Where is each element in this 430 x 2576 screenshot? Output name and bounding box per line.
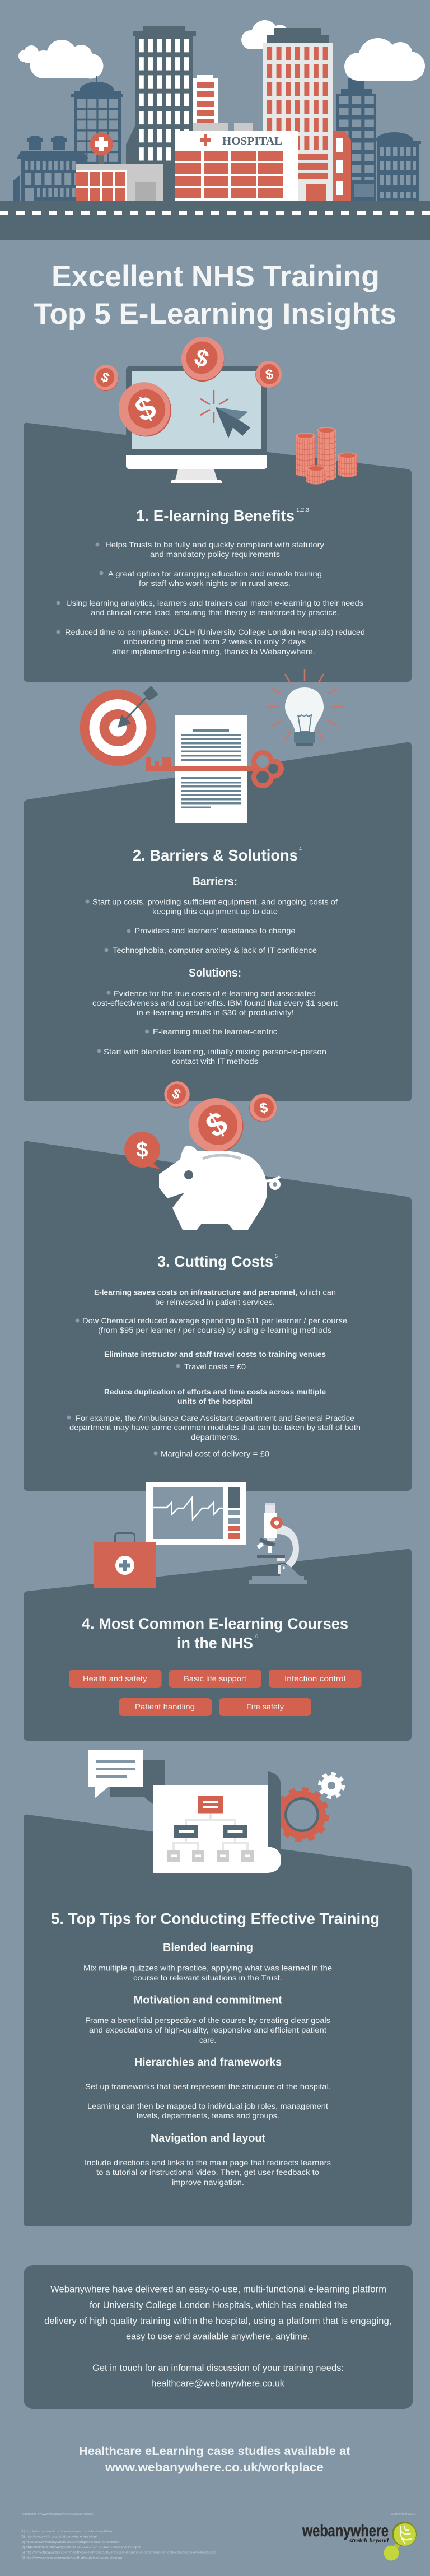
- speech bubble with dollar: [124, 1132, 160, 1169]
- text block: travel costs: [104, 1350, 326, 1371]
- date: September 2015: [391, 2513, 415, 2516]
- panel: e-learning benefits: [24, 423, 412, 682]
- tip: navigation and layout: to a tutorial or instructional video. Then, get user feedback to: [96, 2168, 319, 2177]
- tip: blended learning: Mix multiple quizzes with practice, applying what was learned in the: [83, 1964, 332, 1973]
- tag: patient handling: [119, 1698, 212, 1716]
- text block: benefits list: A great option for arranging education and remote training: [108, 569, 322, 578]
- light bulb: [267, 669, 343, 746]
- tag: fire safety: Fire safety: [246, 1702, 284, 1711]
- target with arrow: [80, 686, 158, 766]
- tag: fire safety: [219, 1698, 311, 1716]
- text block: infrastructure saving: [75, 1287, 347, 1335]
- heading: most common courses: in the NHS: [177, 1634, 253, 1652]
- tip: hierarchies and frameworks: [85, 2057, 331, 2120]
- heading: e-learning benefits: 1,2,3: [296, 507, 309, 513]
- call to action: case studies link: [79, 2445, 350, 2474]
- icon: computer with coins: [89, 331, 357, 484]
- key: [146, 750, 284, 788]
- text block: travel costs: Travel costs = £0: [184, 1362, 246, 1371]
- panel: Webanywhere call to action: [24, 2265, 413, 2409]
- references: [4] http://onlinelibrary.wiley.com/doi/10.1111/j.1470-3327.2005.00614.x/pdf: [21, 2546, 141, 2549]
- ECG monitor: [146, 1482, 246, 1545]
- title: Top 5 E-Learning Insights: [34, 297, 396, 331]
- speech bubble white: [88, 1750, 143, 1798]
- text block: case description: Webanywhere have delivered an easy-to-use, multi-functional e-learning platform: [50, 2285, 386, 2295]
- tip: motivation and commitment: [85, 1994, 330, 2044]
- gear white: [320, 1774, 343, 1797]
- text block: benefits list: and clinical case-load, ensuring that theory is reinforced by practice.: [91, 608, 339, 617]
- text block: barriers list: Start up costs, providing sufficient equipment, and ongoing costs of: [92, 898, 338, 906]
- logo tagline: stretch beyond: [349, 2536, 389, 2544]
- tip: navigation and layout: Navigation and layout: [151, 2132, 265, 2145]
- text block: solutions list: E-learning must be learner-centric: [153, 1027, 277, 1036]
- coin stacks: [296, 427, 357, 484]
- text block: solutions list: contact with IT methods: [172, 1057, 258, 1066]
- tag: basic life support: [169, 1670, 261, 1688]
- text block: contact: healthcare@webanywhere.co.uk: [151, 2379, 285, 2389]
- coin right: $: [259, 1100, 269, 1117]
- dark tower: [126, 26, 196, 201]
- heading: barriers and solutions: 2. Barriers & Solutions: [133, 847, 298, 864]
- text block: reduce duplication: For example, the Ambulance Care Assistant department and General Practice: [76, 1413, 354, 1422]
- cloud left: [18, 40, 103, 78]
- text block: infrastructure saving: which can: [299, 1287, 336, 1296]
- call to action: case studies link: www.webanywhere.co.uk/workplace: [105, 2461, 324, 2474]
- org chart connectors: [172, 1813, 249, 1850]
- blue domed building left: [71, 76, 123, 165]
- text block: case description: for University College London Hospitals, which has enabled the: [90, 2300, 347, 2310]
- text block: benefits list: Helps Trusts to be fully and quickly compliant with statutory: [105, 540, 324, 549]
- icon group: speech bubbles, org chart, gears: [88, 1750, 343, 1873]
- text block: solutions list: cost-effectiveness and cost benefits. IBM found that every $1 spent: [92, 999, 338, 1007]
- hospital cross: [200, 134, 211, 146]
- coin left: $: [170, 1086, 183, 1103]
- references: [21, 2530, 216, 2560]
- small coin left: $: [99, 369, 112, 386]
- panel: cutting costs: [24, 1141, 412, 1491]
- blue building right: [336, 78, 376, 201]
- tip: hierarchies and frameworks: levels, departments, teams and groups.: [137, 2111, 279, 2120]
- medical kit: [94, 1533, 156, 1588]
- subheading: solutions: Solutions:: [189, 967, 241, 979]
- tall red-windowed tower: [263, 28, 333, 201]
- gear red: [277, 1789, 327, 1840]
- heading: cutting costs: 5: [275, 1253, 278, 1259]
- tip: hierarchies and frameworks: Set up frameworks that best represent the structure of the hospital.: [85, 2082, 331, 2091]
- references: [1] http://nhs.premierit.com/news-events...articles/view?id=4: [21, 2530, 112, 2533]
- heading: e-learning benefits: 1. E-learning Benefits: [136, 507, 295, 524]
- cursor with click rays: [200, 390, 250, 438]
- text block: barriers list: Providers and learners’ resistance to change: [134, 927, 296, 935]
- icon: piggy bank with coins: [124, 1077, 281, 1230]
- speech bubble with dollar: $: [136, 1138, 148, 1162]
- document: [175, 715, 247, 823]
- text block: travel costs: Eliminate instructor and staff travel costs to training venues: [104, 1350, 326, 1359]
- text block: benefits list: Reduced time-to-compliance: UCLH (University College London Hospitals) reduced: [65, 627, 365, 636]
- icon group: target, document, key, light bulb: [80, 669, 343, 823]
- small coin left: [89, 361, 123, 395]
- scroll with org chart: [153, 1771, 281, 1873]
- text block: reduce duplication: Reduce duplication of efforts and time costs across multiple: [104, 1387, 326, 1396]
- hospital windows: [175, 151, 283, 198]
- text block: barriers list: keeping this equipment up to date: [152, 908, 278, 915]
- course tags: [69, 1670, 362, 1716]
- pig body: [159, 1146, 281, 1230]
- main hospital building: [175, 123, 298, 201]
- hospital sign: HOSPITAL: [222, 135, 282, 147]
- blue low building left: [13, 136, 88, 201]
- panel: top tips: [24, 1815, 412, 2226]
- tip: hierarchies and frameworks: Hierarchies and frameworks: [134, 2057, 282, 2069]
- org chart boxes: [167, 1796, 254, 1862]
- tip: motivation and commitment: Frame a beneficial perspective of the course by creating clear goals: [85, 2016, 330, 2025]
- cloud right: [344, 38, 425, 81]
- panel: most common courses: [24, 1549, 412, 1741]
- small coin right: [254, 359, 283, 390]
- text block: contact: Get in touch for an informal discussion of your training needs:: [92, 2363, 344, 2373]
- text block: benefits list: Using learning analytics, learners and trainers can match e-learning to their needs: [66, 598, 363, 607]
- credit line: Infographic by www.webanywhere.co.uk/workplace: [21, 2513, 93, 2516]
- hero illustration: hospital city skyline: [0, 20, 430, 240]
- references: [6] http://www.shropscommunityhealth.nhs.uk/mandatory-training: [21, 2556, 122, 2560]
- tip: navigation and layout: Include directions and links to the main page that redirects learners: [85, 2158, 331, 2167]
- tip: blended learning: Blended learning: [163, 1942, 253, 1954]
- text block: benefits list: onboarding time cost from 2 weeks to only 2 days: [124, 637, 306, 646]
- tip: motivation and commitment: and expectations of high-quality, responsive and efficient patient: [89, 2025, 326, 2034]
- heading: most common courses: 6: [255, 1634, 258, 1639]
- text block: barriers list: Technophobia, computer anxiety & lack of IT confidence: [113, 946, 317, 955]
- tag: basic life support: Basic life support: [184, 1674, 246, 1683]
- text block: benefits list: and mandatory policy requirements: [150, 550, 280, 559]
- text block: case description: delivery of high quality training within the hospital, using a platform that is engaging,: [44, 2316, 392, 2326]
- text block: infrastructure saving: (from $95 per learner / per course) by using e-learning methods: [98, 1326, 331, 1335]
- text block: barriers list: [85, 898, 338, 955]
- text block: solutions list: [92, 989, 338, 1066]
- text block: reduce duplication: units of the hospital: [177, 1397, 253, 1406]
- text block: case description: [44, 2285, 392, 2342]
- text block: solutions list: Start with blended learning, initially mixing person-to-person: [104, 1048, 326, 1056]
- tip: navigation and layout: [85, 2132, 331, 2187]
- title: Excellent NHS Training: [52, 260, 380, 293]
- tip: motivation and commitment: care.: [199, 2035, 216, 2044]
- big coin: $: [130, 388, 161, 429]
- icon group: medical kit, ECG monitor, microscope: [94, 1482, 307, 1588]
- tag: infection control: [269, 1670, 362, 1688]
- monitor: [126, 366, 267, 483]
- references: [3] https://www.webanywhere.co.uk/workplace/case-studies/uclh: [21, 2541, 120, 2544]
- text block: infrastructure saving: E-learning saves costs on infrastructure and personnel,: [94, 1287, 297, 1296]
- text block: benefits list: for staff who work nights or in rural areas.: [139, 579, 291, 588]
- text block: case description: easy to use and available anywhere, anytime.: [126, 2332, 310, 2342]
- heading: barriers and solutions: 4: [299, 846, 302, 852]
- top coin: $: [191, 343, 212, 373]
- references: [2] http://www.e-lfh.org.uk/about/why-e-learning/: [21, 2536, 97, 2539]
- heading: most common courses: [82, 1615, 348, 1652]
- small clinic with sign: [76, 132, 163, 201]
- text block: reduce duplication: [67, 1387, 361, 1458]
- top coin: [175, 331, 231, 388]
- coin big: $: [200, 1104, 233, 1145]
- blue domed building far right: [376, 132, 421, 201]
- heading: top tips: 5. Top Tips for Conducting Effective Training: [51, 1910, 380, 1927]
- text block: benefits list: after implementing e-learning, thanks to Webanywhere.: [112, 647, 315, 656]
- text block: benefits list: [56, 540, 365, 656]
- coin big: [183, 1092, 249, 1159]
- microscope: [249, 1503, 307, 1584]
- subheading: barriers: Barriers:: [193, 876, 237, 888]
- logo: webanywhere: [302, 2522, 417, 2560]
- text block: reduce duplication: departments.: [191, 1433, 240, 1442]
- small striped tower: [193, 75, 218, 125]
- tag: health and safety: [69, 1670, 161, 1688]
- tag: health and safety: Health and safety: [83, 1674, 147, 1683]
- cloud middle: [241, 20, 288, 49]
- road: [0, 201, 430, 240]
- tag: patient handling: Patient handling: [135, 1702, 195, 1711]
- title: [34, 260, 396, 331]
- coin left: [160, 1077, 194, 1112]
- tag: infection control: Infection control: [284, 1674, 345, 1683]
- logo wordmark: webanywhere: [302, 2522, 389, 2540]
- heading: most common courses: 4. Most Common E-learning Courses: [82, 1615, 348, 1633]
- references: [5] http://www.theguardian.com/healthcare-network/2015/may/11/e-learning-in-healthcare-benefits-challenges-and-limitations: [21, 2551, 216, 2555]
- tip: navigation and layout: improve navigation.: [172, 2178, 244, 2187]
- logo mark: [384, 2522, 417, 2560]
- tip: hierarchies and frameworks: Learning can then be mapped to individual job roles, management: [87, 2101, 328, 2110]
- coin right: [247, 1092, 278, 1124]
- speech bubble dark: [110, 1760, 165, 1808]
- panel: barriers and solutions: [24, 742, 412, 1101]
- text block: infrastructure saving: be reinvested in patient services.: [155, 1298, 275, 1306]
- text block: contact: [92, 2363, 344, 2389]
- big coin: [113, 376, 177, 443]
- text block: infrastructure saving: Dow Chemical reduced average spending to $11 per learner / per course: [82, 1316, 347, 1325]
- text block: solutions list: Evidence for the true costs of e-learning and associated: [114, 989, 316, 998]
- call to action: case studies link: Healthcare eLearning case studies available at: [79, 2445, 350, 2458]
- text block: solutions list: in e-learning results in $30 of productivity!: [137, 1008, 294, 1017]
- heading: cutting costs: 3. Cutting Costs: [157, 1253, 273, 1270]
- tip: blended learning: [83, 1942, 332, 1982]
- text block: reduce duplication: department may have some common modules that can be taken by staff of both: [69, 1423, 361, 1432]
- text block: reduce duplication: Marginal cost of delivery = £0: [161, 1449, 269, 1458]
- tip: motivation and commitment: Motivation and commitment: [133, 1994, 282, 2007]
- tip: blended learning: course to relevant situations in the Trust.: [133, 1973, 282, 1982]
- small coin right: $: [264, 366, 274, 383]
- red side block: [333, 131, 351, 201]
